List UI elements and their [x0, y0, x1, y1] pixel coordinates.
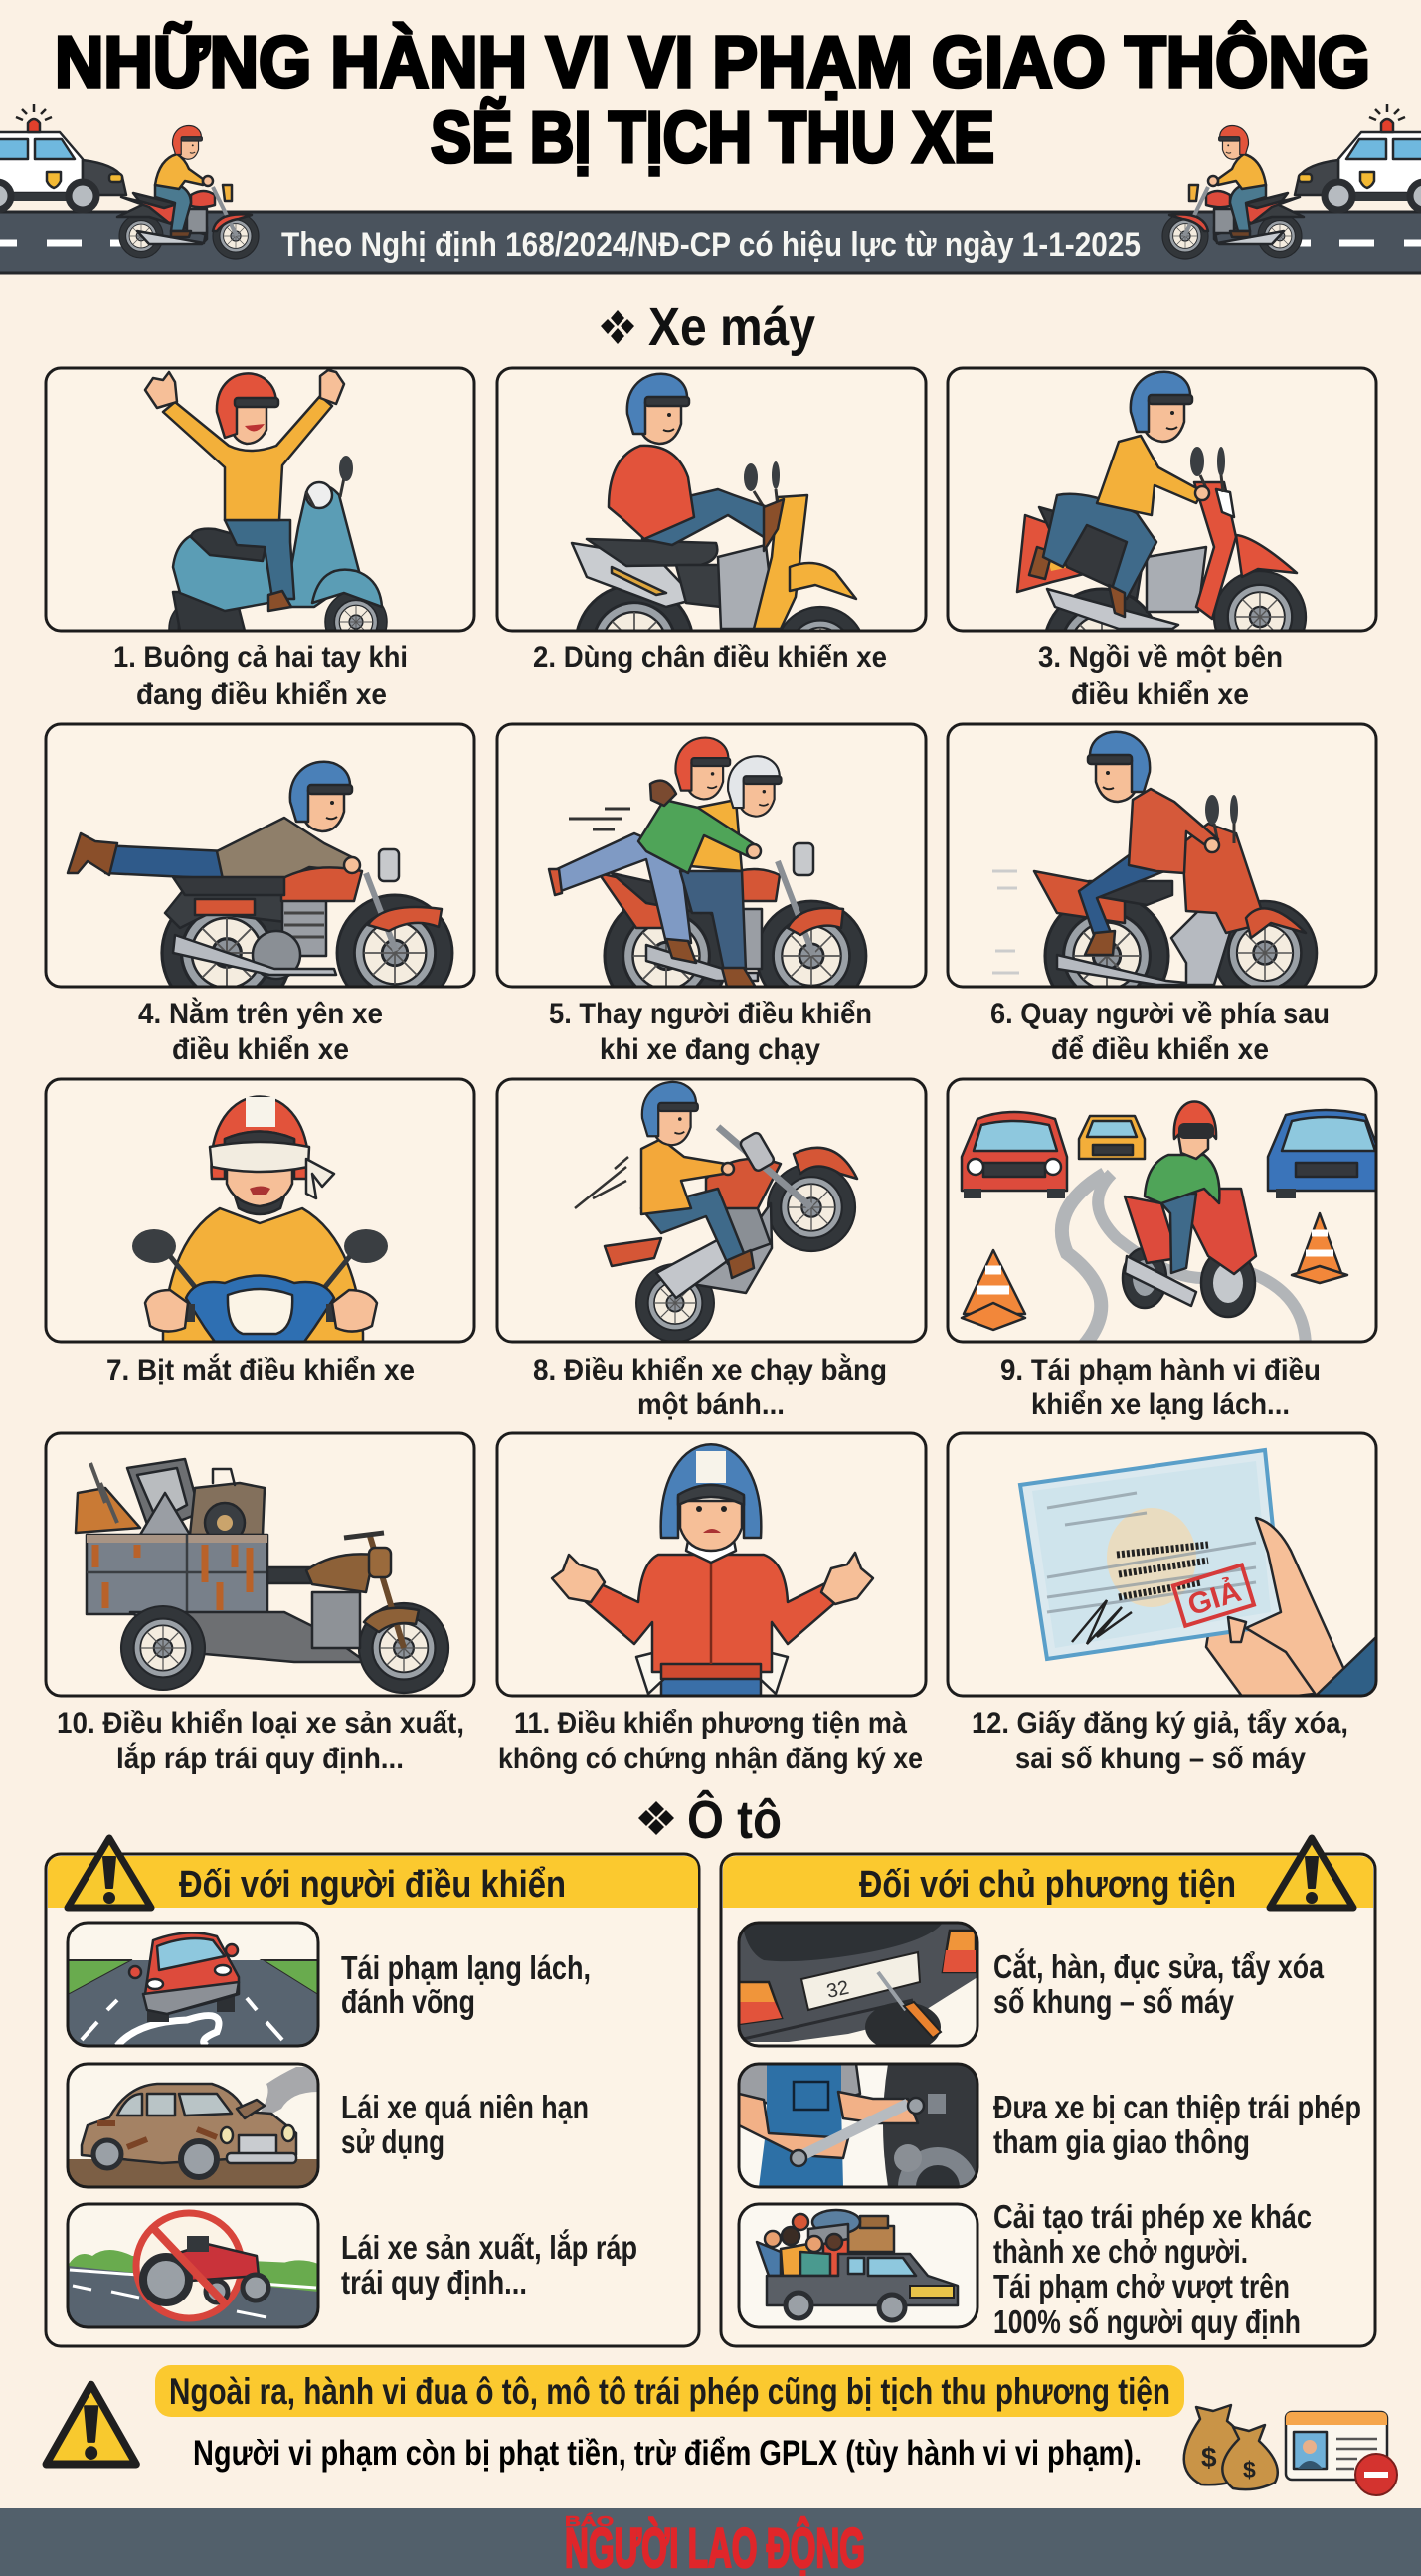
- item image: mechanic: [739, 2064, 977, 2227]
- caption row 4: 11. Điều khiển phương tiện mà: [514, 1707, 907, 1740]
- caption row 3: [106, 1353, 1321, 1421]
- icon: driver licence: [1286, 2412, 1397, 2495]
- panel 3: side sitting: [947, 366, 1378, 633]
- text: đánh võng: [341, 1983, 475, 2020]
- panel 12: fake registration paper: GIẢ: [1184, 1574, 1245, 1622]
- panel 12: fake registration paper: [948, 1433, 1376, 1702]
- icon: minus badge: [1355, 2454, 1397, 2495]
- caption row 1: 2. Dùng chân điều khiển xe: [533, 642, 887, 674]
- caption row 3: khiển xe lạng lách...: [1031, 1388, 1290, 1421]
- callout: highlighted pill: [155, 2365, 1184, 2417]
- caption row 1: điều khiển xe: [1071, 678, 1249, 711]
- panel 10: home-made vehicle: [46, 1433, 474, 1696]
- heading: drivers: Đối với người điều khiển: [179, 1864, 566, 1906]
- header band: owners: [723, 1856, 1373, 1908]
- caption row 1: 3. Ngồi về một bên: [1038, 642, 1283, 674]
- panel 6: turning backward: [948, 724, 1376, 1017]
- caption row 4: 12. Giấy đăng ký giả, tẩy xóa,: [972, 1707, 1348, 1740]
- icon: warning triangle bottom: [46, 2385, 136, 2465]
- caption row 3: 8. Điều khiển xe chạy bằng: [533, 1353, 887, 1386]
- caption row 2: khi xe đang chạy: [600, 1033, 820, 1066]
- caption row 1: 1. Buông cả hai tay khi: [113, 642, 408, 674]
- text: số khung – số máy: [993, 1983, 1235, 2020]
- text: Lái xe quá niên hạn: [341, 2089, 589, 2125]
- logo: [565, 2513, 865, 2576]
- item image: rusty car: [68, 2064, 318, 2187]
- text: Lái xe sản xuất, lắp ráp: [341, 2229, 637, 2266]
- text: tham gia giao thông: [993, 2123, 1250, 2160]
- footer bar: [0, 2508, 1421, 2576]
- item image: plate tampering: [739, 1923, 977, 2052]
- text: 100% số người quy định: [993, 2303, 1301, 2340]
- text: Cải tạo trái phép xe khác: [993, 2198, 1312, 2235]
- title: SẼ BỊ TỊCH THU XE: [431, 97, 994, 178]
- caption row 2: 6. Quay người về phía sau: [990, 998, 1330, 1030]
- caption row 2: 4. Nằm trên yên xe: [138, 997, 383, 1030]
- heading: Ô tô: Ô tô: [687, 1789, 782, 1850]
- text: sử dụng: [341, 2123, 444, 2160]
- panel 11: no registration: [497, 1433, 926, 1702]
- caption row 3: 9. Tái phạm hành vi điều: [1000, 1354, 1321, 1386]
- caption row 3: 7. Bịt mắt điều khiển xe: [106, 1353, 415, 1386]
- text: Tái phạm lạng lách,: [341, 1949, 591, 1986]
- panel: drivers: [46, 1838, 699, 2346]
- panel 9: swerving among cars: [948, 1079, 1381, 1348]
- panel 7: blindfolded: [46, 1079, 474, 1348]
- heading: Ô tô: [638, 1789, 782, 1850]
- caption row 1: đang điều khiển xe: [136, 678, 387, 711]
- icon: warning triangle right: [1270, 1838, 1353, 1908]
- heading: owners: Đối với chủ phương tiện: [859, 1864, 1236, 1906]
- callout: highlighted pill: Ngoài ra, hành vi đua ô tô, mô tô trái phép cũng bị tịch thu phương tiện: [169, 2371, 1170, 2412]
- panel 8: wheelie: [497, 1079, 926, 1342]
- text: additional penalties: Người vi phạm còn bị phạt tiền, trừ điểm GPLX (tùy hành vi vi phạm).: [193, 2434, 1142, 2473]
- caption row 4: [57, 1707, 1348, 1775]
- caption row 4: 10. Điều khiển loại xe sản xuất,: [57, 1707, 464, 1740]
- item image: overloaded pickup: [739, 2204, 977, 2327]
- icon: money bags: $: [1201, 2442, 1217, 2473]
- caption row 2: điều khiển xe: [172, 1033, 349, 1066]
- panel 1: hands off: [46, 368, 474, 659]
- caption row 4: sai số khung – số máy: [1015, 1743, 1306, 1775]
- header band: drivers: [48, 1856, 698, 1908]
- logo: BÁO: [565, 2513, 614, 2530]
- icon: money bags: $: [1243, 2457, 1256, 2483]
- panel 2: foot steering: [495, 366, 927, 633]
- panel: owners: [721, 1838, 1375, 2346]
- title: NHỮNG HÀNH VI VI PHẠM GIAO THÔNG: [55, 22, 1370, 102]
- icon: warning triangle left: [68, 1838, 151, 1908]
- item image: prohibited tractor: [68, 2204, 318, 2327]
- header illustration: road with police cars and motorcycles: [0, 104, 1421, 273]
- caption row 2: 5. Thay người điều khiển: [549, 998, 872, 1030]
- item image: plate tampering: 32: [824, 1977, 851, 2003]
- caption row 4: lắp ráp trái quy định...: [116, 1742, 404, 1775]
- text: Cắt, hàn, đục sửa, tẩy xóa: [993, 1948, 1325, 1985]
- text: trái quy định...: [341, 2264, 527, 2300]
- text: Tái phạm chở vượt trên: [993, 2268, 1290, 2304]
- panel 4: lying on seat: [46, 724, 474, 1017]
- heading: Xe máy: Xe máy: [648, 297, 815, 357]
- caption row 1: [113, 642, 1283, 711]
- icon: money bags: [1184, 2405, 1278, 2489]
- caption row 2: [138, 997, 1330, 1066]
- subtitle on road: Theo Nghị định 168/2024/NĐ-CP có hiệu lực từ ngày 1-1-2025: [281, 226, 1141, 264]
- item image: swerving car: [68, 1923, 318, 2046]
- caption row 2: để điều khiển xe: [1051, 1033, 1269, 1066]
- caption row 3: một bánh...: [637, 1388, 785, 1421]
- caption row 4: không có chứng nhận đăng ký xe: [498, 1743, 923, 1775]
- title: [55, 22, 1370, 178]
- panel 5: swapping drivers: [497, 724, 926, 1017]
- text: thành xe chở người.: [993, 2233, 1248, 2270]
